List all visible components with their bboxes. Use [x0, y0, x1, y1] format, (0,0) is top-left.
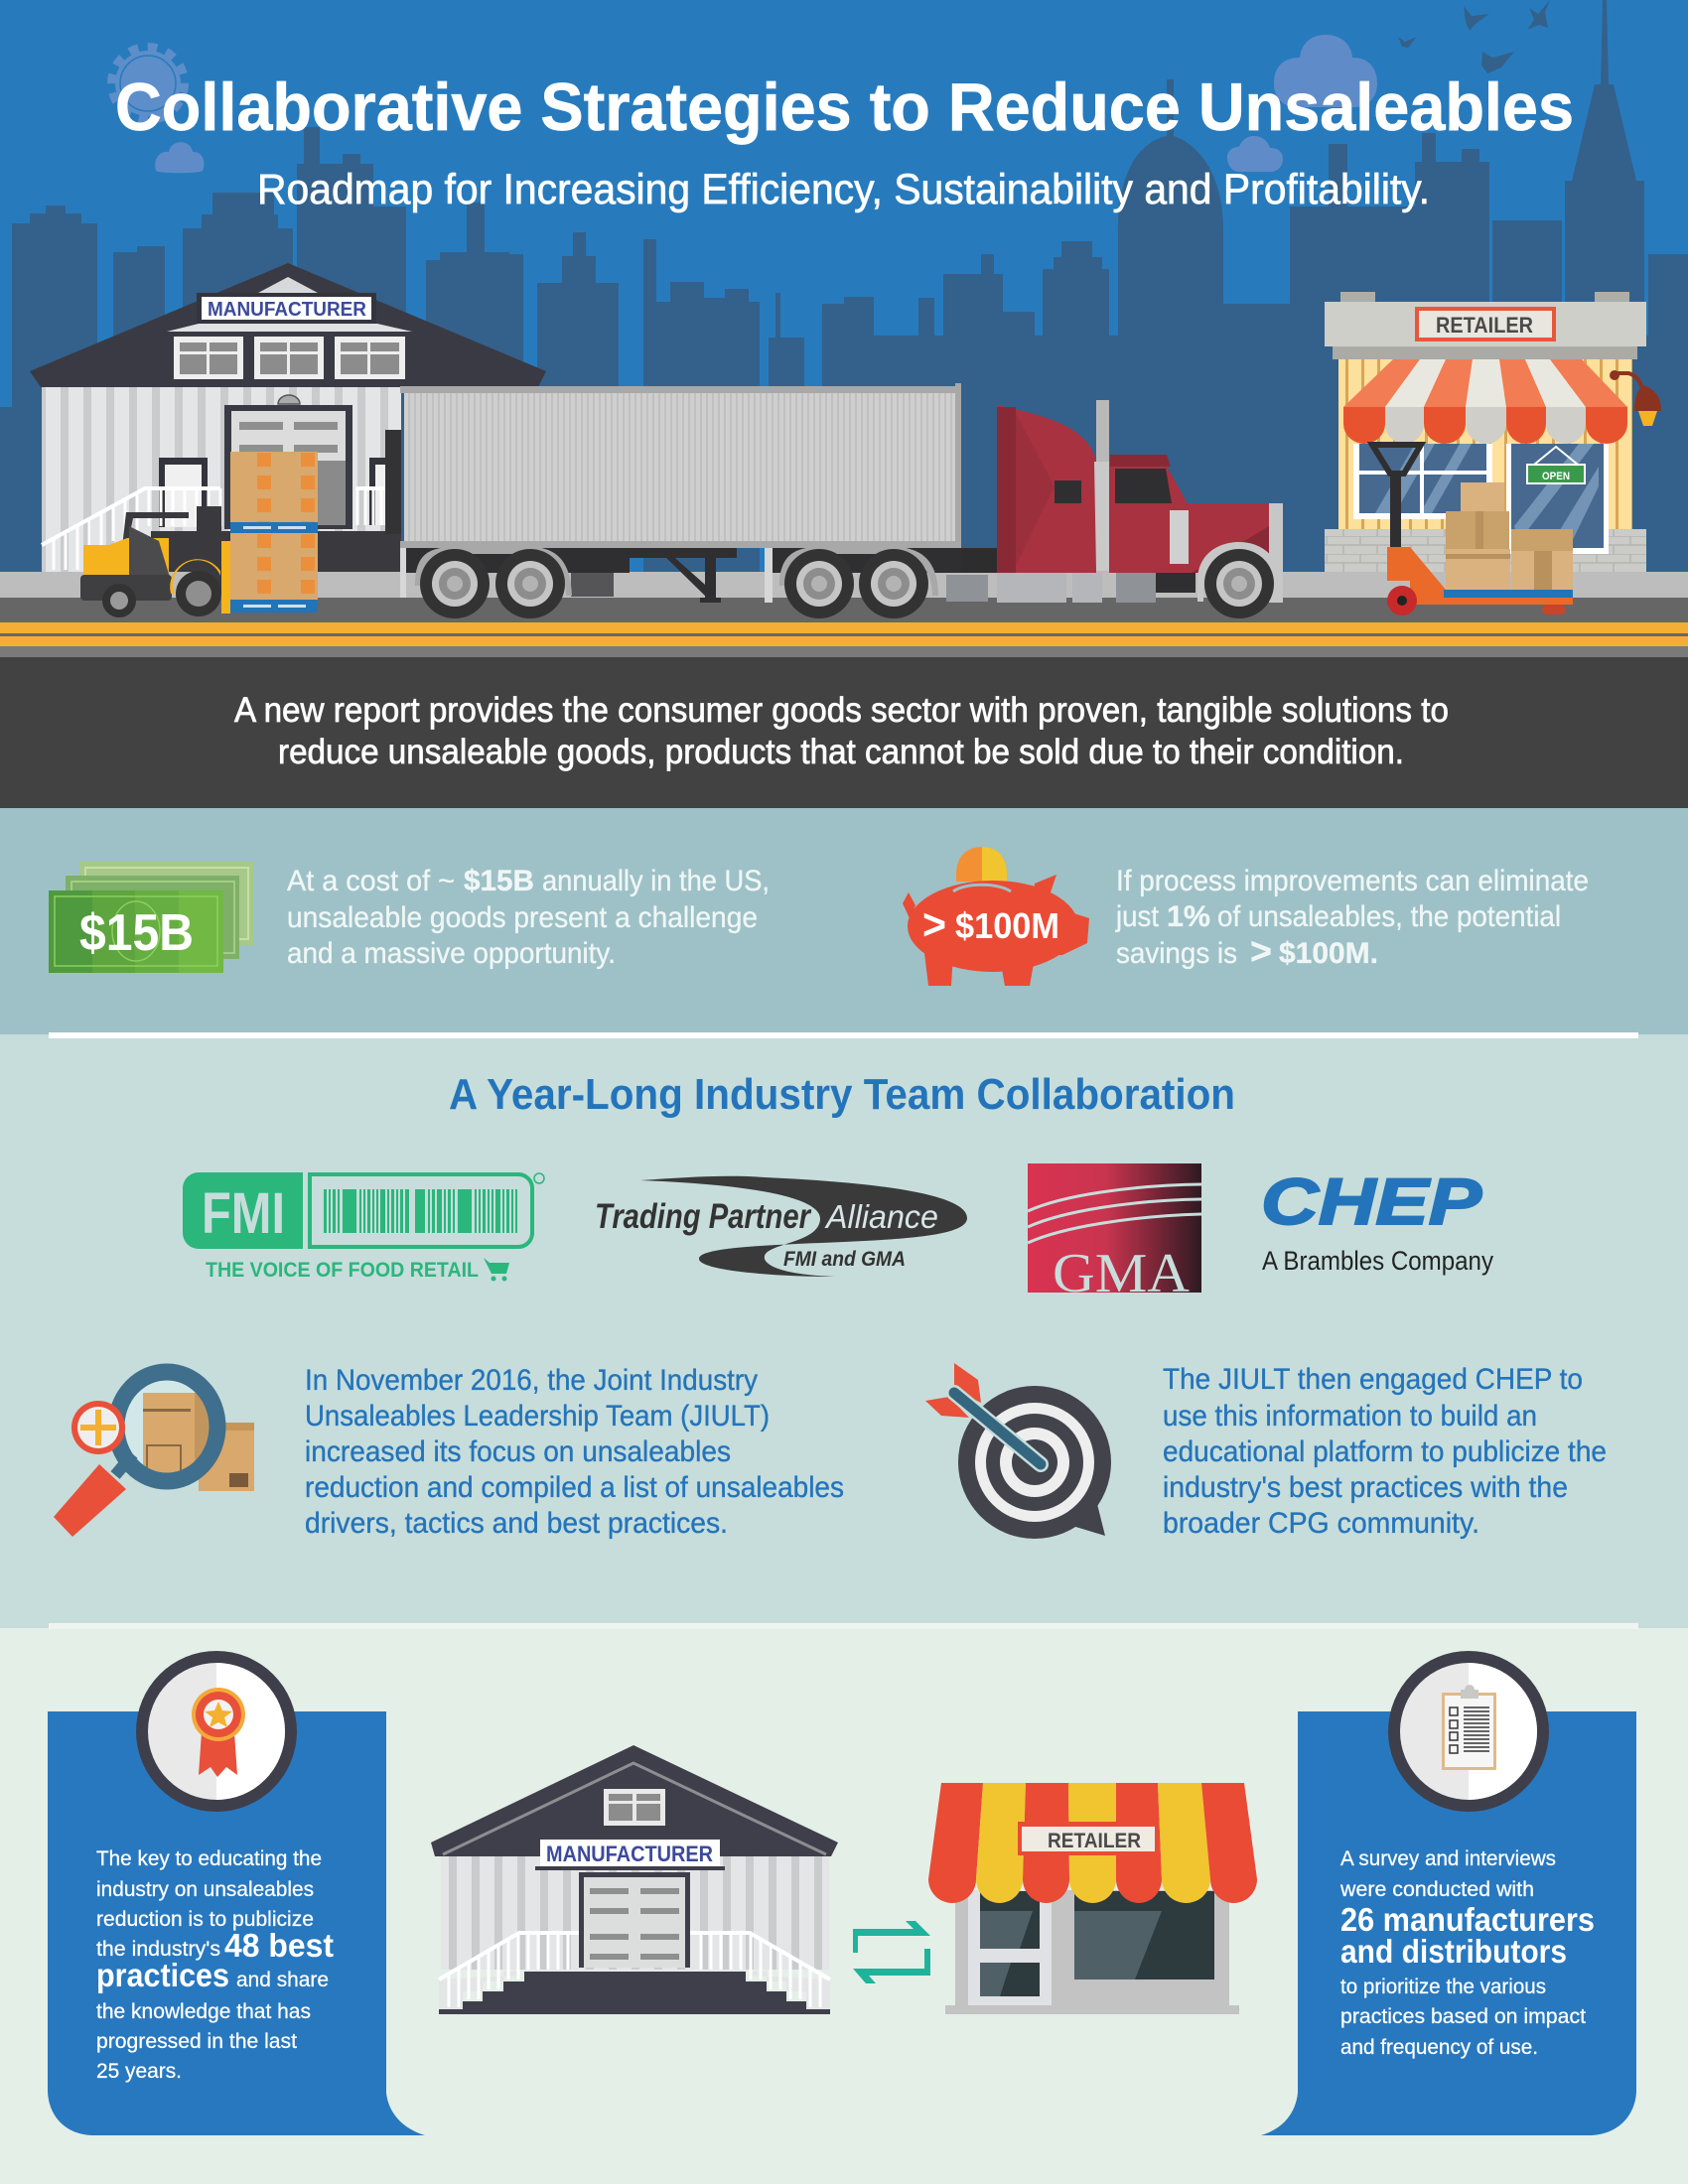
text: CHEP engagement: educational platform to publicize the — [1163, 1435, 1607, 1468]
wall lamp — [1610, 370, 1661, 426]
text: JIULT focus: reduction and compiled a list of unsaleables — [305, 1471, 844, 1504]
text: CHEP engagement: The JIULT then engaged CHEP to — [1163, 1363, 1583, 1396]
band: intro statement: A new report provides the consumer goods sector with proven, tangible solutions to — [234, 691, 1449, 730]
text: best practices: and share — [236, 1969, 329, 1991]
text: CHEP engagement — [1163, 1363, 1607, 1540]
sign: retailer — [1415, 307, 1556, 341]
awning — [1343, 359, 1627, 444]
illustration: manufacturer building — [431, 1745, 838, 2014]
logo: Trading Partner Alliance — [595, 1176, 967, 1277]
background: sky — [0, 0, 1688, 657]
loading door — [224, 405, 352, 529]
door — [579, 1872, 690, 1968]
illustration: manufacturer warehouse — [30, 263, 546, 613]
awning — [928, 1783, 1257, 1903]
text: cost: At a cost of ~ — [287, 865, 455, 897]
stairs — [439, 1933, 830, 2014]
attic window — [604, 1789, 665, 1826]
text: survey — [1339, 1847, 1595, 2059]
text: best practices — [96, 1847, 334, 2083]
text: JIULT focus: In November 2016, the Joint Industry — [305, 1364, 758, 1397]
illustration: pallet jack with boxes — [1372, 445, 1573, 615]
text: cost: annually in the US, — [542, 865, 770, 897]
text: savings: 1% — [1167, 900, 1210, 933]
text: savings: just — [1115, 900, 1160, 933]
logo: Trading Partner Alliance: Trading Partner — [595, 1197, 812, 1236]
icon: target with arrow — [925, 1363, 1111, 1539]
sign: open — [1526, 447, 1586, 484]
text: best practices: progressed in the last — [96, 2030, 297, 2053]
sign: open: OPEN — [1542, 471, 1570, 482]
logo: FMI: FMI — [202, 1181, 285, 1246]
icon: money stack — [49, 862, 253, 973]
logo: Trading Partner Alliance: Alliance — [824, 1198, 938, 1235]
logo: FMI: THE VOICE OF FOOD RETAIL — [206, 1259, 479, 1282]
text: savings: > — [1250, 931, 1272, 973]
fuel tanks — [946, 573, 1196, 603]
text: cost — [287, 865, 770, 970]
wheels — [420, 549, 1274, 618]
text: survey: and frequency of use. — [1340, 2036, 1538, 2059]
badge: medal — [136, 1651, 297, 1812]
text: best practices: 25 years. — [96, 2060, 182, 2083]
icon: piggy bank: $100M — [955, 905, 1059, 946]
text: cost: $15B — [464, 865, 534, 897]
text: best practices: the industry's — [96, 1938, 220, 1961]
illustration: truck — [400, 383, 1283, 618]
text: cost: and a massive opportunity. — [287, 937, 616, 970]
illustration: forklift — [80, 506, 230, 617]
logo: CHEP — [1261, 1164, 1493, 1276]
icon: cloud large — [1274, 35, 1377, 107]
icon: piggy bank: > — [922, 900, 946, 949]
icon: cloud small — [1227, 136, 1283, 172]
logo: Trading Partner Alliance: FMI and GMA — [783, 1248, 906, 1271]
text: savings — [1115, 865, 1589, 973]
sign: manufacturer: MANUFACTURER — [208, 299, 367, 321]
subtitle: Roadmap for Increasing Efficiency, Sustainability and Profitability. — [257, 166, 1430, 213]
sign: manufacturer — [197, 293, 376, 324]
text: best practices: 48 best — [224, 1927, 334, 1964]
cab — [997, 400, 1283, 603]
panel: best practices and survey — [0, 1623, 1688, 2184]
card: survey — [1261, 1651, 1636, 2135]
logo: CHEP: A Brambles Company — [1262, 1246, 1493, 1276]
illustration: retailer shop — [1325, 292, 1661, 572]
text: CHEP engagement: use this information to build an — [1163, 1400, 1537, 1433]
stair railing — [42, 488, 385, 570]
band: intro statement — [0, 657, 1688, 809]
icon: cloud left — [155, 142, 205, 173]
band: intro statement: reduce unsaleable goods, products that cannot be sold due to their condition. — [278, 733, 1404, 771]
text: JIULT focus — [305, 1364, 844, 1540]
heading: A Year-Long Industry Team Collaboration — [449, 1070, 1235, 1119]
text: best practices: the knowledge that has — [96, 2000, 311, 2023]
text: savings: of unsaleables, the potential — [1217, 900, 1561, 933]
illustration: retailer shop — [928, 1783, 1257, 2014]
icon: magnifying glass with boxes — [54, 1372, 254, 1537]
shop window — [1353, 444, 1492, 519]
window glass — [1074, 1891, 1214, 1979]
text: survey: A survey and interviews — [1340, 1847, 1556, 1870]
logo: GMA: GMA — [1053, 1243, 1191, 1304]
trailer — [400, 383, 961, 548]
sign: retailer — [1018, 1822, 1159, 1855]
logo: GMA — [1028, 1163, 1201, 1304]
text: JIULT focus: increased its focus on unsaleables — [305, 1435, 731, 1468]
wheel rear — [102, 584, 136, 617]
landing gear — [659, 551, 721, 603]
stacked pallets — [230, 452, 318, 613]
sign: retailer: RETAILER — [1436, 313, 1533, 338]
text: savings: savings is — [1116, 937, 1237, 970]
icon: birds — [1398, 0, 1550, 73]
icon: sun — [112, 48, 184, 119]
sign: retailer: RETAILER — [1048, 1830, 1141, 1852]
arrows: exchange — [853, 1921, 930, 1983]
road — [0, 572, 1688, 657]
wheel front — [176, 571, 221, 616]
text: survey: to prioritize the various — [1340, 1976, 1546, 1998]
logo: CHEP: CHEP — [1261, 1164, 1482, 1238]
text: JIULT focus: Unsaleables Leadership Team (JIULT) — [305, 1400, 770, 1433]
title: Collaborative Strategies to Reduce Unsaleables — [115, 69, 1574, 145]
panel: cost and savings — [0, 808, 1688, 1034]
text: survey: and distributors — [1340, 1933, 1567, 1970]
badge: clipboard — [1388, 1651, 1549, 1812]
logo: FMI — [183, 1172, 544, 1282]
text: savings: If process improvements can eliminate — [1116, 865, 1589, 897]
text: survey: were conducted with — [1339, 1878, 1534, 1901]
door glass — [980, 1891, 1040, 1996]
icon: piggy bank — [903, 847, 1089, 986]
text: best practices: The key to educating the — [96, 1847, 322, 1870]
card: best practices — [48, 1651, 425, 2135]
sign: manufacturer: MANUFACTURER — [546, 1842, 713, 1866]
text: best practices: reduction is to publicize — [96, 1908, 314, 1931]
text: best practices: industry on unsaleables — [96, 1878, 314, 1901]
upper windows — [174, 337, 405, 379]
text: survey: 26 manufacturers — [1340, 1901, 1595, 1938]
panel: team collaboration — [0, 1032, 1688, 1628]
text: CHEP engagement: broader CPG community. — [1163, 1507, 1479, 1540]
shop door — [1506, 444, 1609, 554]
text: CHEP engagement: industry's best practices with the — [1163, 1471, 1568, 1504]
text: best practices: practices — [96, 1957, 229, 1993]
text: JIULT focus: drivers, tactics and best practices. — [305, 1507, 728, 1540]
icon: money stack: $15B — [79, 904, 194, 962]
text: cost: unsaleable goods present a challenge — [287, 901, 758, 934]
text: savings: $100M. — [1279, 937, 1378, 970]
text: survey: practices based on impact — [1340, 2005, 1586, 2028]
city skyline — [0, 0, 1688, 572]
